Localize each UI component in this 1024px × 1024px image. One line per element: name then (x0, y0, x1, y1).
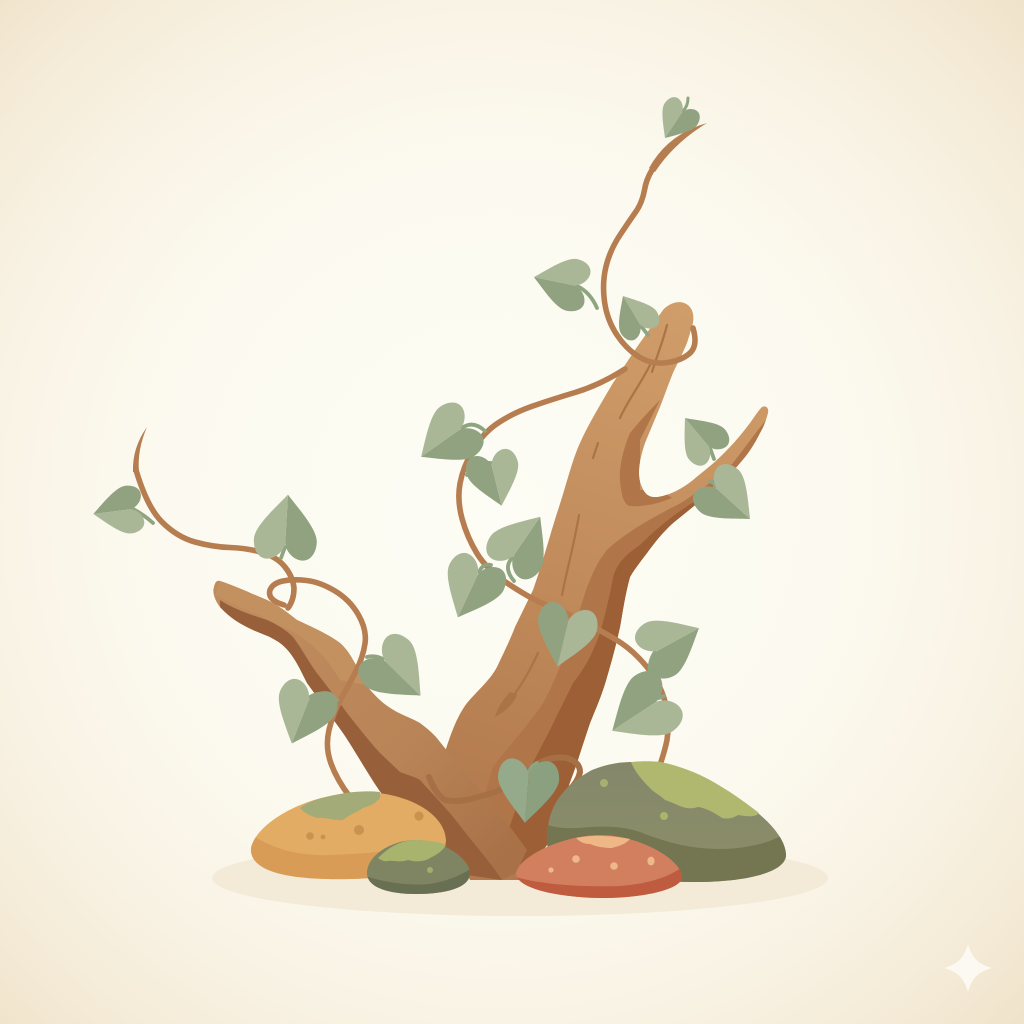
main long vine (459, 369, 668, 765)
crotch shading (620, 400, 672, 506)
red rock (516, 835, 682, 898)
leaf above fork (667, 403, 734, 470)
leaf near trunk tip (605, 285, 663, 344)
moss on small rock (378, 840, 446, 861)
leaf at base (494, 757, 560, 825)
moss speck (427, 867, 433, 873)
red rock cap (576, 836, 630, 848)
leaf centre (480, 500, 565, 585)
moss on orange rock (300, 791, 380, 820)
small green rock (367, 840, 470, 894)
small rock lower band (368, 870, 470, 894)
branch lighter top band (215, 581, 365, 685)
leaf upper left of vine (529, 251, 597, 314)
moss speck (600, 779, 608, 787)
bark marks (495, 325, 667, 717)
leaf on trunk (528, 599, 601, 674)
red rock spots (548, 855, 655, 873)
leaf inside vine curve (463, 446, 527, 512)
orange rock spots (306, 811, 424, 840)
rock shadow band (547, 825, 786, 882)
moss speck (660, 812, 668, 820)
leaf right of left branch (352, 628, 443, 718)
left vine upper (133, 427, 294, 608)
leaf above left branch (253, 493, 319, 561)
trunk right dark shadow (510, 502, 695, 864)
orange rock (245, 791, 450, 885)
leaf far left (90, 484, 153, 538)
left vine loop (270, 580, 365, 797)
main trunk with fork (446, 302, 768, 880)
bottom vine (429, 758, 580, 801)
leaf lower left of vine (431, 548, 511, 630)
orange rock lower band (250, 838, 446, 880)
back part of top vine tip behind trunk (690, 328, 695, 352)
left branch (213, 581, 527, 880)
sparkle watermark (944, 944, 992, 992)
branch lower dark band (220, 600, 502, 880)
leaf top (649, 94, 704, 149)
trunk and branch mid-tone band (498, 420, 766, 848)
leaf left of left branch (264, 675, 342, 754)
top vine (604, 123, 707, 363)
big green rock (547, 761, 786, 882)
moss on big rock (631, 761, 759, 819)
leaf right upper (630, 602, 713, 684)
red rock lower band (518, 869, 682, 898)
leaf below fork (687, 458, 769, 540)
ground shadow (212, 840, 828, 916)
leaf right lower (594, 665, 689, 759)
leaf left large (404, 397, 489, 481)
